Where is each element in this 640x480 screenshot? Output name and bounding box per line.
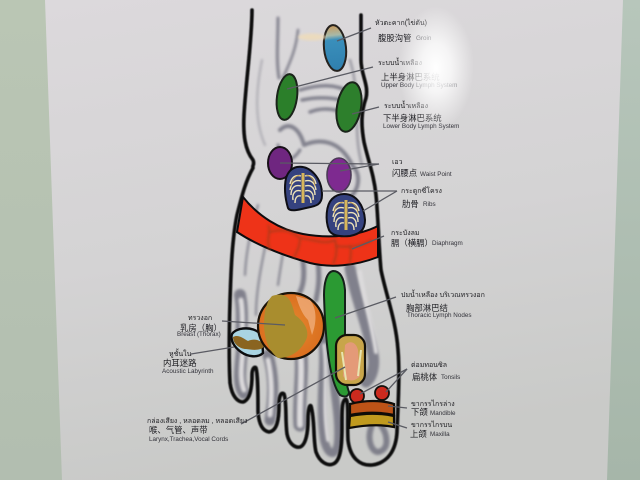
reflex zone: tonsils [350,386,389,403]
label: waist point [392,159,452,178]
label: ribs: Ribs [423,201,436,208]
label: acoustic labyrinth [162,347,214,375]
label: groin: 腹股沟管 [378,33,412,43]
label: upper body lymph system: Upper Body Lymph System [381,82,457,89]
label: tonsils: 扁桃体 [412,372,438,382]
label: maxilla: 上颌 [410,429,427,439]
label: lower body lymph system: ระบบน้ำเหลือง [384,99,428,110]
x-ray foot bones [240,18,386,453]
label: tonsils: ต่อมทอนซิล [411,361,447,369]
label: breast thorax: Breast (Thorax) [177,331,221,338]
label: diaphragm: Diaphragm [432,240,463,247]
reflex zone: ribs right [327,194,365,236]
label: acoustic labyrinth: 内耳迷路 [163,358,197,368]
reflex zone: maxilla [349,414,394,428]
label: thoracic lymph nodes: Thoracic Lymph Nodes [407,312,472,319]
label: waist point: เอว [392,159,403,166]
label: mandible: 下颌 [411,407,428,417]
label: maxilla [410,420,452,439]
reflex zone: ribs left [285,167,322,210]
label: upper body lymph system: ระบบน้ำเหลือง [378,56,422,67]
label: thoracic lymph nodes [401,288,485,319]
label: ribs: กระดูกซี่โครง [401,186,442,195]
reflex zone: mandible [350,401,394,415]
label: mandible: ขากรรไกรล่าง [411,399,455,408]
reflex zone: thoracic lymph nodes [324,271,349,396]
label: upper body lymph system: 上半身淋巴系统 [381,72,440,82]
label: ribs: 肋骨 [402,199,419,209]
label: breast thorax: 乳房（胸） [180,323,222,333]
label: thoracic lymph nodes: 胸部淋巴结 [406,303,448,313]
reflex zone: breast thorax [258,293,324,359]
glare streak on foot [298,34,326,40]
foot outline [229,10,399,465]
label: breast thorax: ทรวงอก [188,315,212,322]
label: acoustic labyrinth: Acoustic Labyrinth [162,368,214,375]
label: diaphragm [391,229,463,248]
label: acoustic labyrinth: หูชั้นใน [169,347,192,358]
label: mandible: Mandible [430,410,456,417]
label: breast thorax [177,315,222,338]
label: groin [375,18,432,43]
label: mandible [411,399,456,417]
glare reflection [398,6,474,130]
label: ribs [401,186,442,209]
reflex zone: diaphragm band [237,197,378,266]
reflex zone: groin [322,24,348,72]
label: larynx trachea vocal cords: 喉、气管、声带 [149,425,208,435]
label: tonsils: Tonsils [441,374,460,381]
label: waist point: 闪腰点 [392,168,417,178]
label: diaphragm: กระบังลม [391,229,420,237]
label: groin: Groin [416,35,432,42]
label: maxilla: Maxilla [430,431,450,438]
label: groin: หัวตะคาก(ไข่ดัน) [375,18,427,27]
reflex zone: lower body lymph [333,80,365,134]
label: larynx trachea vocal cords [147,417,247,443]
label: lower body lymph system [383,99,459,130]
label: maxilla: ขากรรไกรบน [411,420,452,429]
label: larynx trachea vocal cords: Larynx,Trachea,Vocal Cords [149,436,228,443]
label: thoracic lymph nodes: ปมน้ำเหลือง บริเวณทรวงอก [401,288,485,299]
label: waist point: Waist Point [420,171,452,178]
label: diaphragm: 膈（横膈） [391,238,433,248]
leader lines [191,28,407,428]
reflex zone: waist point right [327,158,351,192]
reflex zone: larynx trachea [336,335,365,385]
label: larynx trachea vocal cords: กล่องเสียง , หลอดลม , หลอดเสียง [147,417,247,425]
reflex zone: ear labyrinth [231,328,264,356]
reflex zone: waist point left [268,147,292,179]
label: lower body lymph system: 下半身淋巴系统 [383,113,442,123]
reflex zone: upper body lymph [274,73,300,121]
label: tonsils [411,361,460,382]
label: lower body lymph system: Lower Body Lymph System [383,123,459,130]
label: upper body lymph system [378,56,457,89]
